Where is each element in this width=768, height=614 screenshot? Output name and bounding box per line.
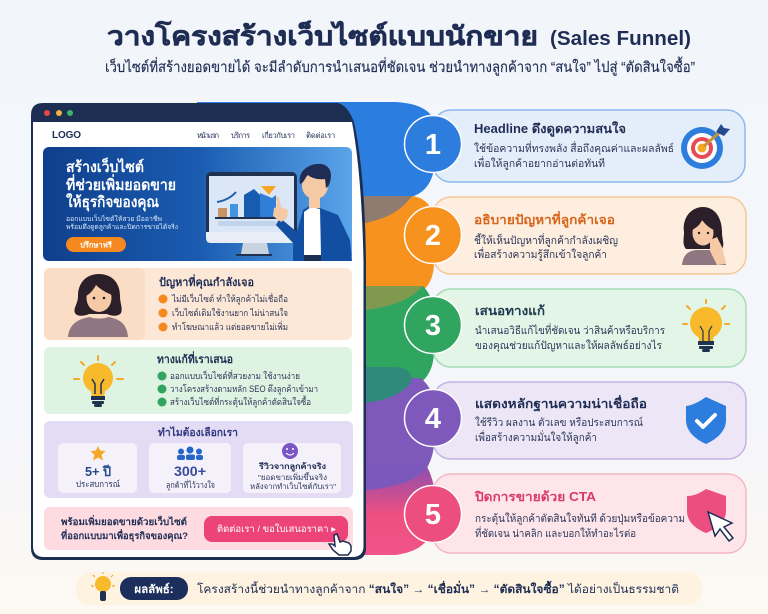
hero banner xyxy=(43,147,352,261)
card 1 text xyxy=(474,141,674,170)
stat: review: รีวิวจากลูกค้าจริง xyxy=(258,461,326,472)
panel: call to action xyxy=(44,507,353,555)
card 3 text xyxy=(475,323,665,352)
panel: problem xyxy=(44,268,352,340)
card 2 xyxy=(404,197,746,274)
card 5 text xyxy=(475,512,685,540)
card 3 xyxy=(404,289,746,367)
icon: target xyxy=(681,124,730,169)
navigation: หน้าแรก xyxy=(197,131,219,140)
stat: clients: ลูกค้าที่ไว้วางใจ xyxy=(166,479,215,491)
card 2 text xyxy=(474,233,618,261)
number 4 xyxy=(404,390,462,446)
logo: LOGO xyxy=(52,130,81,141)
problem heading: ปัญหาที่คุณกำลังเจอ xyxy=(159,274,254,290)
stat: years: 5+ ปี xyxy=(85,464,111,479)
card 4 text: เพื่อสร้างความมั่นใจให้ลูกค้า xyxy=(475,430,597,444)
number 1 xyxy=(404,116,462,172)
card 1 text: ใช้ข้อความที่ทรงพลัง สื่อถึงคุณค่าและผลลัพธ์ xyxy=(474,141,674,155)
hero heading: ที่ช่วยเพิ่มยอดขาย xyxy=(66,174,176,194)
result label: ผลลัพธ์: xyxy=(134,582,174,596)
title: วางโครงสร้างเว็บไซต์แบบนักขาย xyxy=(107,20,538,51)
navigation: บริการ xyxy=(231,131,250,140)
card 5 text: ที่ชัดเจน น่าคลิก และบอกให้ทำอะไรต่อ xyxy=(475,526,636,540)
monitor illustration xyxy=(206,172,297,256)
card 2 heading: อธิบายปัญหาที่ลูกค้าเจอ xyxy=(474,211,615,228)
title: (Sales Funnel) xyxy=(550,28,691,50)
hero text: ออกแบบเว็บไซต์ให้สวย มืออาชีพ xyxy=(66,214,162,223)
stat: years xyxy=(58,443,137,493)
solution heading: ทางแก้ที่เราเสนอ xyxy=(157,351,233,366)
card 5 text: กระตุ้นให้ลูกค้าตัดสินใจทันที ด้วยปุ่มหรือข้อความ xyxy=(475,512,685,525)
number 2 xyxy=(404,206,462,264)
number 5 xyxy=(404,486,462,542)
card 3 text: ของคุณช่วยแก้ปัญหาและให้ผลลัพธ์อย่างไร xyxy=(475,339,662,352)
number 3 xyxy=(404,296,462,354)
cta text xyxy=(61,514,188,542)
result bar xyxy=(76,572,702,605)
number 2: 2 xyxy=(425,220,441,252)
icon: shield xyxy=(686,397,726,444)
stat: clients: 300+ xyxy=(174,464,206,479)
stat: review: "ยอดขายเพิ่มขึ้นจริง xyxy=(258,472,327,482)
result text: โครงสร้างนี้ช่วยนำทางลูกค้าจาก “สนใจ” → “เชื่อมั่น” → “ตัดสินใจซื้อ” ได้อย่างเป็นธรรมชาติ xyxy=(197,580,679,596)
hero heading: สร้างเว็บไซต์ xyxy=(66,157,144,176)
card 4 text xyxy=(475,416,643,444)
icon: light bulb xyxy=(74,356,123,407)
why heading: ทำไมต้องเลือกเรา xyxy=(158,426,238,439)
solution list xyxy=(158,369,318,408)
panel: solution xyxy=(44,347,352,414)
card 3 text: นำเสนอวิธีแก้ไขที่ชัดเจน ว่าสินค้าหรือบริการ xyxy=(475,323,665,337)
presenter illustration xyxy=(273,164,352,261)
stat: review: หลังจากทำเว็บไซต์กับเรา" xyxy=(250,481,336,491)
card 2 text: เพื่อสร้างความรู้สึกเข้าใจลูกค้า xyxy=(474,247,607,261)
navigation xyxy=(197,130,335,140)
problem list: เว็บไซต์เดิมใช้งานยาก ไม่น่าสนใจ xyxy=(172,306,288,318)
card 1 text: เพื่อให้ลูกค้าอยากอ่านต่อทันที xyxy=(474,156,605,170)
card 4 text: ใช้รีวิว ผลงาน ตัวเลข หรือประสบการณ์ xyxy=(475,416,643,429)
card 1 xyxy=(404,110,745,182)
subtitle: เว็บไซต์ที่สร้างยอดขายได้ จะมีลำดับการนำเสนอที่ชัดเจน ช่วยนำทางลูกค้าจาก “สนใจ” ไปสู่ “ตัดสินใจซื้อ” xyxy=(105,56,695,76)
cta button xyxy=(204,516,348,542)
browser mockup xyxy=(31,103,746,605)
stat: clients xyxy=(149,443,231,493)
hero heading: ให้ธุรกิจของคุณ xyxy=(66,193,159,212)
stat: review xyxy=(243,443,341,493)
hero button: ปรึกษาฟรี xyxy=(80,240,113,250)
solution list: ออกแบบเว็บไซต์ที่สวยงาม ใช้งานง่าย xyxy=(170,369,300,381)
card 5 heading: ปิดการขายด้วย CTA xyxy=(474,490,596,504)
icon: worried woman xyxy=(68,274,128,337)
cta button: ติดต่อเรา / ขอใบเสนอราคา ▸ xyxy=(217,523,336,535)
stat: years: ประสบการณ์ xyxy=(76,479,120,489)
card 4 heading: แสดงหลักฐานความน่าเชื่อถือ xyxy=(475,395,647,412)
solution list: วางโครงสร้างตามหลัก SEO ดึงลูกค้าเข้ามา xyxy=(170,384,318,395)
navigation: เกี่ยวกับเรา xyxy=(262,130,295,140)
cta text: พร้อมเพิ่มยอดขายด้วยเว็บไซต์ xyxy=(61,514,187,528)
card 5 xyxy=(404,474,746,553)
hero text xyxy=(66,214,178,231)
card 2 text: ชี้ให้เห็นปัญหาที่ลูกค้ากำลังเผชิญ xyxy=(474,233,618,247)
number 3: 3 xyxy=(425,310,441,342)
problem list xyxy=(158,292,288,332)
window controls xyxy=(44,110,73,116)
number 4: 4 xyxy=(425,403,441,435)
navigation: ติดต่อเรา xyxy=(306,131,335,140)
problem list: ทำโฆษณาแล้ว แต่ยอดขายไม่เพิ่ม xyxy=(172,320,288,332)
number 1: 1 xyxy=(425,129,441,161)
icon: light bulb xyxy=(91,572,115,601)
hero text: พร้อมดึงดูดลูกค้าและปิดการขายได้จริง xyxy=(66,223,178,231)
problem list: ไม่มีเว็บไซต์ ทำให้ลูกค้าไม่เชื่อถือ xyxy=(171,292,288,305)
icon: shield with cursor xyxy=(687,489,733,541)
funnel bands xyxy=(197,102,436,555)
hero heading xyxy=(66,157,176,212)
number 5: 5 xyxy=(425,499,441,531)
icon: light bulb xyxy=(683,300,729,352)
icon: worried woman xyxy=(682,207,726,265)
card 4 xyxy=(404,382,746,459)
icon: hand cursor xyxy=(329,534,351,555)
panel: why us xyxy=(44,421,353,498)
title xyxy=(107,20,691,51)
cta text: ที่ออกแบบมาเพื่อธุรกิจของคุณ? xyxy=(61,528,188,542)
card 3 heading: เสนอทางแก้ xyxy=(475,304,545,318)
solution list: สร้างเว็บไซต์ที่กระตุ้นให้ลูกค้าตัดสินใจซื้อ xyxy=(170,395,311,408)
card 1 heading: Headline ดึงดูดความสนใจ xyxy=(474,121,626,137)
hero button xyxy=(66,237,126,252)
result label xyxy=(120,577,188,600)
